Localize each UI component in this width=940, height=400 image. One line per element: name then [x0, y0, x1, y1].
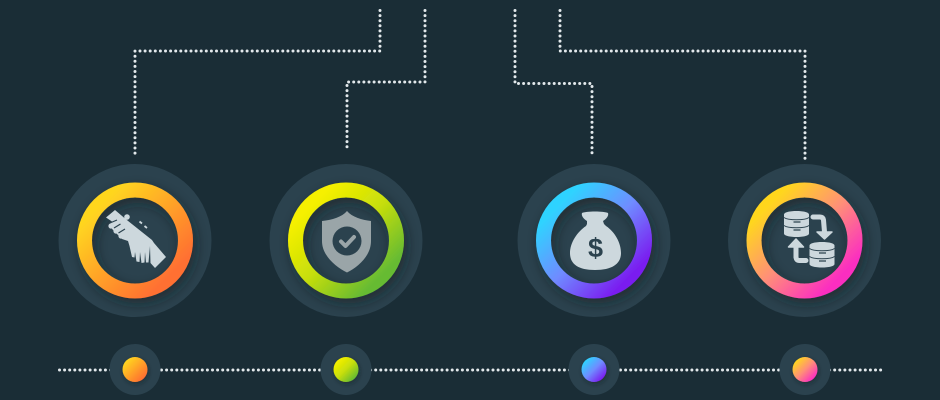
arrow: down	[813, 217, 832, 239]
timeline node 3	[568, 344, 620, 395]
connector: second step	[347, 10, 425, 150]
connector: first step	[135, 10, 380, 154]
gradient ring: blue violet	[544, 190, 644, 291]
connector: fourth step	[560, 10, 805, 163]
step 3 badge	[518, 164, 670, 317]
step 1 badge	[58, 164, 212, 317]
knuckle	[124, 214, 130, 220]
timeline node 1	[110, 344, 160, 395]
database: top	[784, 211, 809, 237]
icon: money bag	[570, 212, 621, 270]
timeline node 2	[320, 344, 372, 395]
icon: databases exchanging data	[784, 211, 834, 268]
icon: hand gripping tool	[106, 210, 166, 268]
arrow: up	[788, 239, 806, 260]
gradient ring: orange	[84, 190, 186, 291]
step 2 badge	[270, 164, 422, 317]
step 4 badge	[728, 164, 881, 317]
dotted connectors	[135, 10, 805, 163]
timeline node 4	[780, 344, 830, 395]
database: bottom	[810, 242, 834, 268]
dollar sign: $	[588, 233, 603, 263]
tool bar and hand	[106, 210, 166, 268]
finger lobes	[108, 223, 124, 239]
dotted timeline	[60, 368, 882, 372]
gradient ring: yellow pink	[754, 190, 855, 291]
connector: third step	[515, 10, 592, 157]
finger gaps	[110, 220, 125, 233]
icon: shield with check	[322, 211, 371, 272]
motion marks	[140, 222, 147, 228]
gradient ring: yellow green	[296, 190, 396, 291]
